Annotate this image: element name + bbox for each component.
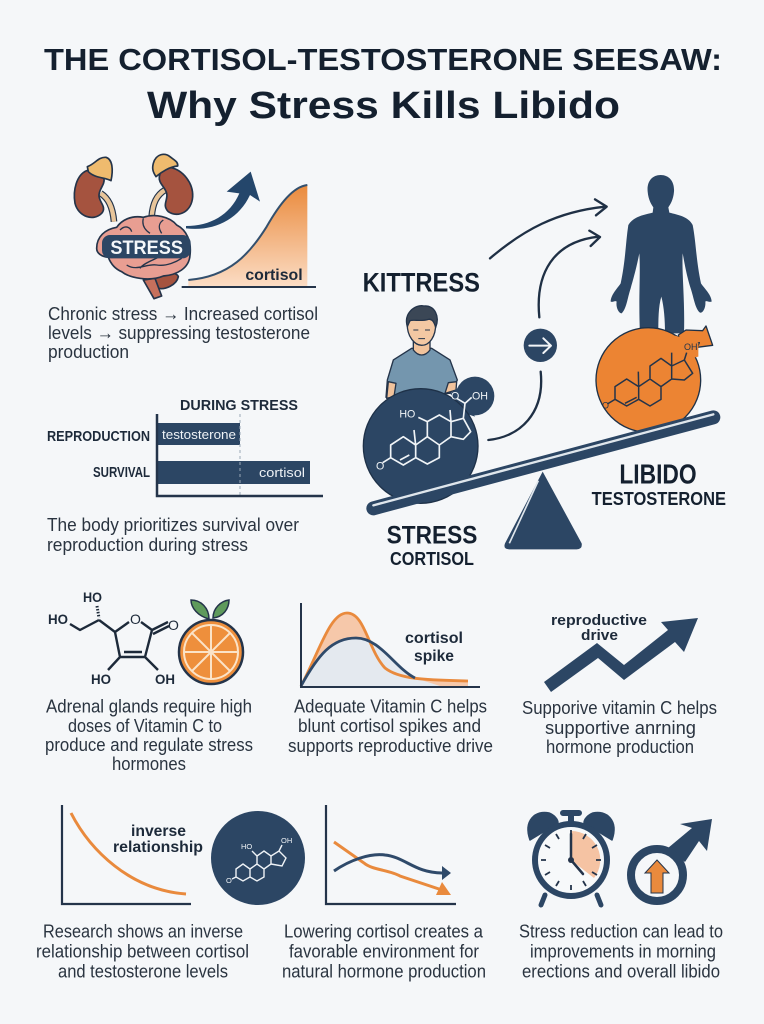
chart: lowering cortisol	[326, 805, 456, 904]
icon: cortisol molecule ball: OH	[472, 390, 488, 402]
icon: vitamin C molecule: OH	[155, 671, 175, 687]
chart: cortisol curve	[182, 185, 316, 287]
title: THE CORTISOL-TESTOSTERONE SEESAW:	[44, 42, 722, 77]
icon: molecule circle: O	[226, 876, 232, 885]
text: stress reduction: Stress reduction can lead to	[519, 920, 723, 942]
icon: testosterone molecule ball	[596, 326, 713, 432]
text: inverse relationship: relationship between cortisol	[36, 940, 249, 962]
icon: stressed man	[386, 306, 457, 398]
icon: molecule circle	[211, 811, 305, 905]
text: chronic stress: levels → suppressing testosterone	[48, 322, 310, 343]
icon: cortisol molecule ball: O	[376, 460, 384, 472]
label: STRESS CORTISOL: CORTISOL	[390, 548, 474, 569]
text: blunt cortisol: Adequate Vitamin C helps	[294, 696, 487, 716]
label: STRESS CORTISOL	[387, 521, 477, 569]
icon: male symbol with up arrow	[631, 819, 712, 901]
bar chart: during stress: SURVIVAL	[93, 465, 150, 481]
icon: vitamin C molecule	[48, 589, 179, 687]
icon: vitamin C molecule: HO	[48, 611, 68, 627]
icon: seesaw beam	[373, 414, 713, 508]
icon: testosterone molecule ball: OH	[684, 342, 697, 352]
chart: cortisol spike	[301, 603, 480, 687]
text: supportive vitamin C: hormone production	[546, 736, 694, 757]
label pill: STRESS: STRESS	[110, 238, 183, 259]
chart: inverse relationship: inverse	[131, 823, 186, 840]
icon: arrow circle	[524, 329, 557, 362]
text: supportive vitamin C: supportive anrning	[545, 717, 696, 738]
icon: molecule circle: HO	[241, 842, 252, 851]
icon: cortisol molecule ball: O	[451, 390, 459, 402]
text: lowering cortisol: favorable environment for	[289, 940, 479, 962]
icon: vitamin C molecule: O	[130, 611, 141, 627]
icon: cortisol molecule ball: HO	[399, 408, 415, 420]
text: lowering cortisol: natural hormone production	[282, 960, 486, 982]
title	[44, 42, 722, 127]
icon: vitamin C molecule: HO	[83, 589, 102, 605]
chart: cortisol spike: cortisol	[405, 630, 463, 647]
icon: reproductive drive arrow: reproductive	[551, 612, 647, 629]
text: lowering cortisol: Lowering cortisol creates a	[284, 920, 484, 942]
text: supportive vitamin C: Supporive vitamin C helps	[522, 697, 717, 718]
text: inverse relationship: and testosterone levels	[58, 960, 228, 982]
text: blunt cortisol: blunt cortisol spikes and	[298, 715, 481, 736]
icon: orange	[179, 600, 243, 684]
icon: molecule circle: OH	[281, 836, 292, 845]
label: LIBIDO TESTOSTERONE: TESTOSTERONE	[592, 488, 726, 509]
icon: kidneys and adrenal glands	[74, 154, 193, 222]
arrow: upper curved	[490, 199, 607, 258]
chart: cortisol spike: spike	[414, 648, 454, 665]
text: chronic stress: production	[48, 341, 129, 362]
panel: hormone seesaw	[363, 175, 726, 569]
text: survival over reproduction: reproduction during stress	[47, 534, 248, 555]
chart: cortisol curve: cortisol	[245, 267, 303, 284]
text: adrenal glands: produce and regulate stress	[45, 734, 253, 755]
label: LIBIDO TESTOSTERONE: LIBIDO	[619, 458, 697, 489]
bar chart: during stress: cortisol	[259, 466, 305, 480]
text: survival over reproduction: The body prioritizes survival over	[47, 514, 299, 535]
text: adrenal glands: Adrenal glands require high	[46, 696, 252, 716]
icon: vitamin C molecule: O	[168, 617, 179, 633]
icon: fulcrum	[504, 472, 582, 549]
text: adrenal glands: doses of Vitamin C to	[68, 715, 222, 736]
arrow: lower curved	[539, 231, 600, 317]
text: chronic stress: Chronic stress → Increased cortisol	[48, 303, 318, 324]
text: stress reduction: erections and overall libido	[522, 960, 720, 982]
text: blunt cortisol: supports reproductive drive	[288, 735, 493, 756]
icon: brain	[97, 216, 190, 299]
arrow: rising	[186, 172, 260, 229]
icon: male body silhouette	[611, 175, 712, 333]
icon: cortisol molecule ball	[363, 377, 494, 503]
label: KITTRESS: KITTRESS	[363, 268, 480, 298]
label: STRESS CORTISOL: STRESS	[387, 521, 477, 549]
icon: reproductive drive arrow	[544, 612, 698, 692]
text: inverse relationship: Research shows an inverse	[43, 920, 243, 942]
bar chart: during stress	[47, 397, 323, 496]
chart: inverse relationship	[62, 805, 203, 904]
icon: testosterone molecule ball: O	[602, 400, 609, 410]
panel: chronic stress illustration	[74, 154, 316, 299]
bar chart: during stress: REPRODUCTION	[47, 429, 150, 445]
bar chart: during stress: testosterone	[162, 428, 236, 442]
chart: inverse relationship: relationship	[113, 839, 203, 856]
title: Why Stress Kills Libido	[147, 85, 620, 127]
text: adrenal glands: hormones	[112, 753, 186, 774]
icon: vitamin C molecule: HO	[91, 671, 111, 687]
text: stress reduction: improvements in morning	[530, 940, 716, 962]
icon: alarm clock	[528, 812, 614, 905]
bar chart: during stress: DURING STRESS	[180, 397, 298, 414]
icon: reproductive drive arrow: drive	[581, 627, 618, 644]
arrow: from cortisol ball	[488, 372, 541, 440]
label: LIBIDO TESTOSTERONE	[592, 458, 726, 509]
